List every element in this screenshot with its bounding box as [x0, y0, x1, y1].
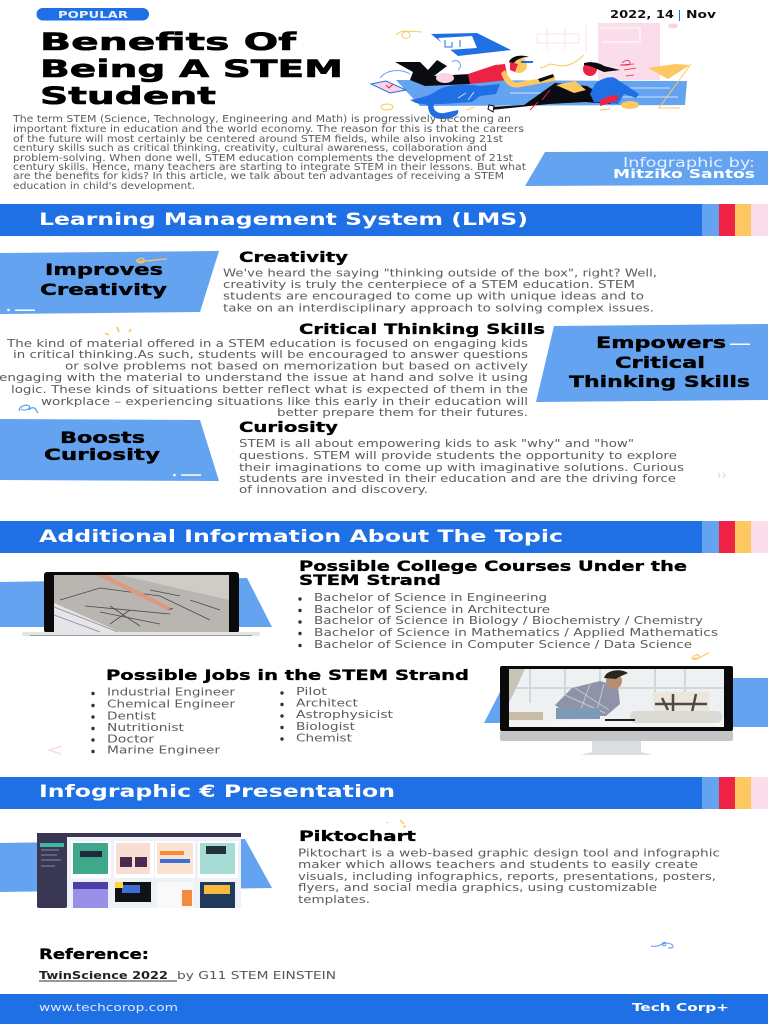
heading: possible college courses: Possible College Courses Under the: [299, 559, 687, 575]
text: critical thinking: workplace – experiencing situations like this early in their education will: [41, 396, 528, 408]
panel: empowers critical thinking skills: Critical: [615, 353, 705, 372]
intro paragraph: of the future will most certainly be centered around STEM fields, while also invoking 21st: [13, 134, 503, 145]
text: piktochart: templates.: [298, 894, 370, 906]
title: Being A STEM: [40, 55, 343, 83]
footer: [0, 994, 768, 1024]
text: critical thinking: in critical thinking.As such, students will be encouraged to answer questions: [13, 349, 528, 361]
intro paragraph: [12, 114, 526, 192]
title: Benefits Of: [40, 28, 297, 56]
panel: boosts curiosity: Curiosity: [44, 445, 161, 464]
icon: pink mark: [49, 746, 62, 754]
section header: additional information: [0, 521, 768, 553]
section header: infographic and presentation: Infographic € Presentation: [39, 782, 395, 801]
list: college courses: Bachelor of Science in Engineering: [314, 592, 547, 604]
panel: improves creativity: Improves: [45, 260, 163, 279]
footer: Tech Corp+: [632, 1001, 729, 1014]
text: critical thinking: or solve problems not based on memorization but based on actively: [65, 360, 528, 372]
list: jobs right column: Chemist: [296, 732, 352, 744]
icon: pink marks: [718, 473, 725, 478]
text: curiosity: questions. STEM will provide students the opportunity to explore: [239, 450, 677, 462]
tag: popular: [36, 8, 149, 21]
heading: possible college courses: [299, 559, 687, 589]
heading: piktochart: Piktochart: [299, 829, 416, 845]
text: piktochart: Piktochart is a web-based graphic design tool and infographic: [298, 848, 720, 860]
footer: www.techcorop.com: [39, 1002, 178, 1014]
list: jobs left column: Doctor: [107, 734, 155, 746]
icon: yellow sparks: [105, 327, 131, 335]
list: jobs left column: Nutritionist: [107, 722, 184, 734]
list: college courses: [298, 592, 718, 651]
text: piktochart: [298, 848, 720, 906]
text: critical thinking: better prepare them for their futures.: [277, 407, 528, 419]
icon: blue squiggle: [651, 942, 673, 948]
list: jobs left column: Industrial Engineer: [107, 686, 236, 698]
list: jobs right column: Pilot: [296, 686, 327, 698]
reference line: TwinScience 2022: [39, 970, 168, 982]
panel: improves creativity: [0, 251, 219, 314]
icon: yellow sparks: [387, 820, 406, 827]
list: jobs right column: Astrophysicist: [296, 709, 393, 721]
title: Student: [40, 82, 216, 110]
section header: LMS: [0, 204, 768, 236]
intro paragraph: problem-solving. When done well, STEM education complements the development of 21st: [13, 153, 513, 164]
text: curiosity: of innovation and discovery.: [239, 484, 428, 496]
text: curiosity: their imaginations to come up with imaginative solutions. Curious: [239, 462, 684, 474]
heading: creativity: Creativity: [239, 250, 348, 266]
text: piktochart: maker which allows teachers and students to easily create: [298, 859, 698, 871]
text: curiosity: STEM is all about empowering kids to ask "why" and "how": [239, 438, 634, 450]
list: college courses: Bachelor of Science in Computer Science / Data Science: [314, 639, 692, 651]
list: college courses: Bachelor of Science in Architecture: [314, 604, 550, 616]
text: creativity: students are encouraged to come up with unique ideas and to: [223, 290, 644, 302]
credit panel: Mitziko Santos: [613, 167, 755, 181]
intro paragraph: century skills such as critical thinking, creativity, cultural awareness, collaboration and: [13, 143, 487, 154]
date: 2022, 14: [610, 8, 674, 21]
reference line: [39, 970, 336, 982]
text: piktochart: visuals, including infographics, reports, presentations, posters,: [298, 871, 716, 883]
list: college courses: Bachelor of Science in Mathematics / Applied Mathematics: [314, 627, 718, 639]
section header: LMS: Learning Management System (LMS): [39, 210, 528, 229]
text: creativity: [223, 268, 657, 314]
credit panel: [525, 151, 768, 186]
image: piktochart dashboard: [0, 833, 272, 908]
text: critical thinking: [0, 338, 528, 419]
section header: infographic and presentation: [0, 777, 768, 809]
heading: reference: Reference:: [39, 947, 149, 963]
panel: empowers critical thinking skills: [536, 324, 768, 402]
text: critical thinking: engaging with the material to understand the issue at hand and solve it using: [0, 372, 528, 384]
heading: possible jobs: Possible Jobs in the STEM Strand: [106, 668, 469, 684]
intro paragraph: education in child's development.: [13, 181, 195, 192]
text: critical thinking: logic. These kinds of situations better reflect what is expected of them in the: [11, 384, 528, 396]
credit panel: Infographic by:: [623, 156, 755, 171]
icon: blue squiggle: [19, 405, 38, 413]
list: college courses: Bachelor of Science in Biology / Biochemistry / Chemistry: [314, 615, 703, 627]
heading: curiosity: Curiosity: [239, 420, 338, 436]
text: creativity: creativity is truly the centerpiece of a STEM education. STEM: [223, 279, 635, 291]
text: creativity: We've heard the saying "thinking outside of the box", right? Well,: [223, 268, 657, 280]
intro paragraph: The term STEM (Science, Technology, Engineering and Math) is progressively becoming an: [12, 114, 511, 125]
reference line: by G11 STEM EINSTEIN: [177, 970, 336, 982]
text: piktochart: flyers, and social media graphics, using customizable: [298, 882, 657, 894]
text: creativity: take on an interdisciplinary approach to solving complex issues.: [223, 302, 654, 314]
text: critical thinking: The kind of material offered in a STEM education is focused on engaging kids: [6, 338, 528, 350]
title: [40, 28, 343, 110]
text: curiosity: [239, 438, 684, 496]
tag: popular: POPULAR: [58, 10, 128, 21]
heading: possible college courses: STEM Strand: [299, 573, 441, 589]
illustration: students studying: [371, 23, 691, 119]
icon: yellow squiggle: [692, 653, 709, 659]
list: jobs left column: Marine Engineer: [107, 744, 221, 756]
list: jobs left column: Dentist: [107, 710, 156, 722]
image: desktop monitor with engineer: [484, 666, 768, 755]
panel: improves creativity: Creativity: [40, 280, 168, 299]
date: [610, 8, 717, 21]
list: jobs left column: Chemical Engineer: [107, 698, 236, 710]
date: Nov: [686, 8, 717, 21]
list: jobs right column: Architect: [296, 698, 358, 710]
panel: boosts curiosity: [0, 419, 219, 481]
list: jobs right column: [280, 686, 393, 744]
panel: empowers critical thinking skills: Empowers: [596, 333, 726, 352]
panel: empowers critical thinking skills: Thinking Skills: [569, 372, 750, 391]
list: jobs left column: [91, 686, 236, 756]
text: curiosity: students are invested in their education and are the driving force: [239, 473, 676, 485]
heading: critical thinking skills: Critical Thinking Skills: [299, 322, 545, 338]
intro paragraph: important fixture in education and the world economy. The reason for this is that the careers: [13, 124, 524, 135]
section header: additional information: Additional Information About The Topic: [39, 527, 563, 546]
image: laptop with blueprint: [0, 572, 272, 636]
panel: boosts curiosity: Boosts: [60, 428, 145, 447]
intro paragraph: century skills. Hence, many teachers are starting to integrate STEM in their lessons. But what: [13, 162, 526, 173]
intro paragraph: are the benefits for kids? In this article, we talk about ten advantages of receiving a STEM: [13, 171, 504, 182]
list: jobs right column: Biologist: [296, 721, 355, 733]
